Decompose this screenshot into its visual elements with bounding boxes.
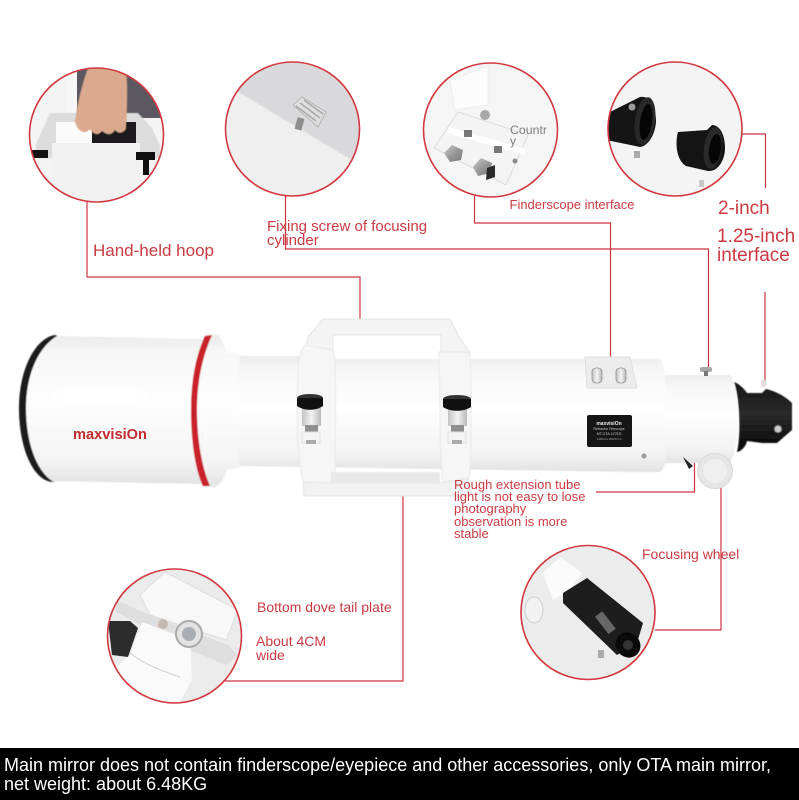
flange (205, 335, 246, 487)
label: 2-inch 1.25-inch interface (717, 198, 795, 266)
label: rough extension tube: observation is more (454, 514, 567, 529)
label: about 4cm wide (255, 633, 326, 663)
label: focusing wheel: Focusing wheel (642, 546, 739, 562)
label: 2-inch 1.25-inch interface: interface (717, 245, 790, 266)
focusing wheel (683, 457, 693, 469)
focuser (734, 382, 792, 452)
label: bottom dove tail plate: Bottom dove tail plate (257, 599, 392, 615)
handle (303, 319, 470, 366)
connector lines (87, 134, 766, 681)
footer banner: net weight: about 6.48KG (4, 774, 207, 794)
callout: finderscope interface (423, 62, 558, 197)
label: about 4cm wide: About 4CM (256, 633, 326, 649)
label: rough extension tube: photography (454, 501, 527, 516)
nameplate: Refractor Telescope (593, 427, 625, 431)
red ring (191, 335, 212, 486)
label: rough extension tube: Rough extension tube (454, 477, 580, 492)
footer banner (0, 748, 799, 800)
label: 2-inch 1.25-inch interface: 1.25-inch (717, 226, 795, 247)
extension tube (665, 375, 738, 463)
label: 2-inch 1.25-inch interface: 2-inch (718, 198, 770, 219)
nameplate (587, 415, 632, 447)
callout: finderscope interface: Countr (510, 123, 547, 137)
focusing screw on top (700, 367, 712, 372)
label: fixing screw of focusing cylinder: Fixing screw of focusing (267, 218, 427, 235)
label: about 4cm wide: wide (255, 647, 285, 663)
main tube (237, 356, 792, 472)
knob left (297, 394, 323, 444)
callout: dovetail plate (107, 569, 242, 705)
tube rings (297, 345, 471, 496)
label: hand-held hoop: Hand-held hoop (93, 241, 214, 260)
callout: fixing screw (225, 62, 360, 197)
callout: 2-inch and 1.25-inch adapters (606, 62, 743, 197)
finder base (585, 357, 637, 388)
label: fixing screw of focusing cylinder (267, 218, 427, 249)
nameplate: 1400mm Ø127mm (597, 437, 622, 441)
knob right (443, 395, 471, 444)
callout: finderscope interface: y (510, 134, 516, 148)
label: rough extension tube: light is not easy to lose (454, 489, 586, 504)
logo: maxvision: maxvisiOn (73, 427, 147, 443)
dew shield (19, 335, 246, 487)
callout: focuser (520, 545, 656, 681)
callout: hand-held hoop (29, 68, 168, 203)
label: finderscope interface: Finderscope interface (510, 197, 635, 212)
nameplate: maxvisiOn (596, 421, 622, 427)
label: rough extension tube (454, 477, 586, 541)
telescope (19, 319, 792, 496)
nameplate: MT-OTA-127ED (597, 432, 622, 436)
label: fixing screw of focusing cylinder: cylinder (267, 232, 319, 249)
dovetail plate (331, 472, 440, 485)
label: rough extension tube: stable (454, 526, 489, 541)
footer banner: Main mirror does not contain finderscope/eyepiece and other accessories, only OTA main mirror, (4, 755, 771, 775)
